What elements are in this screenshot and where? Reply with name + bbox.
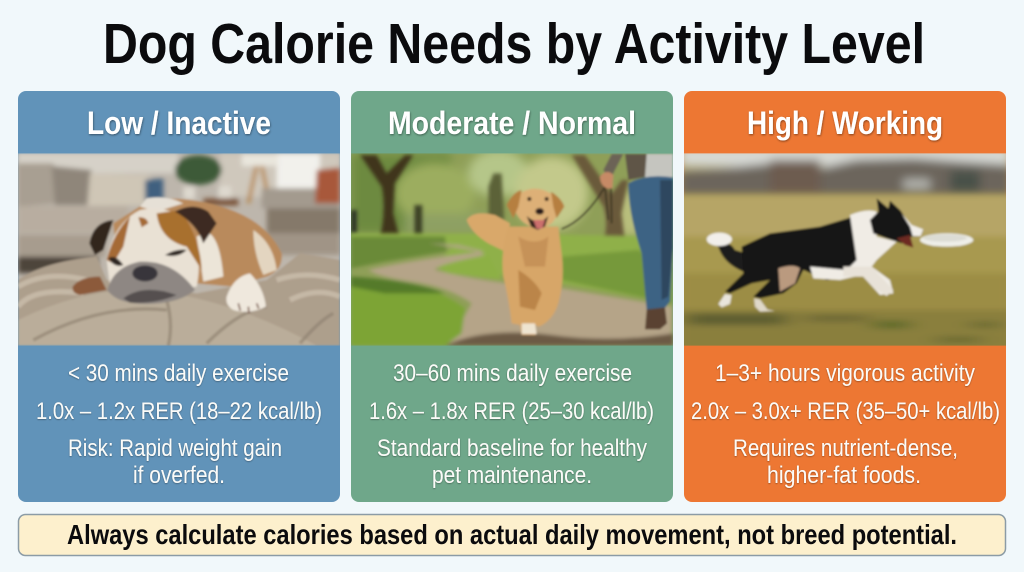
text: moderate / normal details: 1.6x – 1.8x RER (25–30 kcal/lb) bbox=[369, 398, 654, 425]
text: moderate / normal details bbox=[369, 360, 654, 489]
bulldog muzzle bbox=[107, 262, 195, 304]
panel: high / working bbox=[667, 91, 1023, 502]
photo: border collie catching frisbee bbox=[684, 153, 1006, 346]
frisbee bbox=[920, 233, 973, 247]
blanket bbox=[18, 253, 340, 346]
walker bbox=[600, 154, 673, 329]
dog tail bbox=[717, 243, 746, 272]
dog body bbox=[724, 216, 858, 300]
text: high / working details: Requires nutrient-dense, bbox=[733, 435, 958, 462]
panel: low / inactive bbox=[18, 91, 340, 502]
dog head bbox=[870, 198, 923, 243]
tree trunks bbox=[351, 155, 628, 245]
leash bbox=[562, 187, 612, 229]
dog head bbox=[515, 188, 556, 227]
heading: low / inactive: Low / Inactive bbox=[87, 105, 271, 141]
heading: high / working: High / Working bbox=[747, 105, 943, 141]
photo: bulldog sleeping on blanket bbox=[18, 153, 340, 346]
text: low / inactive details: if overfed. bbox=[133, 462, 225, 489]
dog body bbox=[502, 227, 563, 335]
text: moderate / normal details: pet maintenance. bbox=[432, 462, 592, 489]
text: low / inactive details: 1.0x – 1.2x RER (18–22 kcal/lb) bbox=[36, 398, 322, 425]
text: moderate / normal details: 30–60 mins daily exercise bbox=[393, 360, 632, 387]
text: high / working details: 1–3+ hours vigorous activity bbox=[715, 360, 975, 387]
photo: golden retriever walking in park bbox=[351, 150, 673, 346]
bulldog paws bbox=[73, 277, 107, 295]
bulldog body bbox=[113, 199, 282, 287]
heading: moderate / normal: Moderate / Normal bbox=[388, 105, 636, 141]
text: low / inactive details: < 30 mins daily exercise bbox=[68, 360, 289, 387]
text: high / working details bbox=[691, 360, 1000, 489]
text: high / working details: higher-fat foods. bbox=[767, 462, 921, 489]
text: low / inactive details bbox=[36, 360, 322, 489]
dog chest and legs bbox=[810, 211, 897, 295]
text: moderate / normal details: Standard baseline for healthy bbox=[377, 435, 647, 462]
grass and path bbox=[351, 233, 673, 346]
panel: moderate / normal bbox=[351, 91, 673, 502]
dog tail bbox=[467, 213, 510, 252]
bulldog head bbox=[107, 209, 199, 293]
text: low / inactive details: Risk: Rapid weight gain bbox=[68, 435, 282, 462]
